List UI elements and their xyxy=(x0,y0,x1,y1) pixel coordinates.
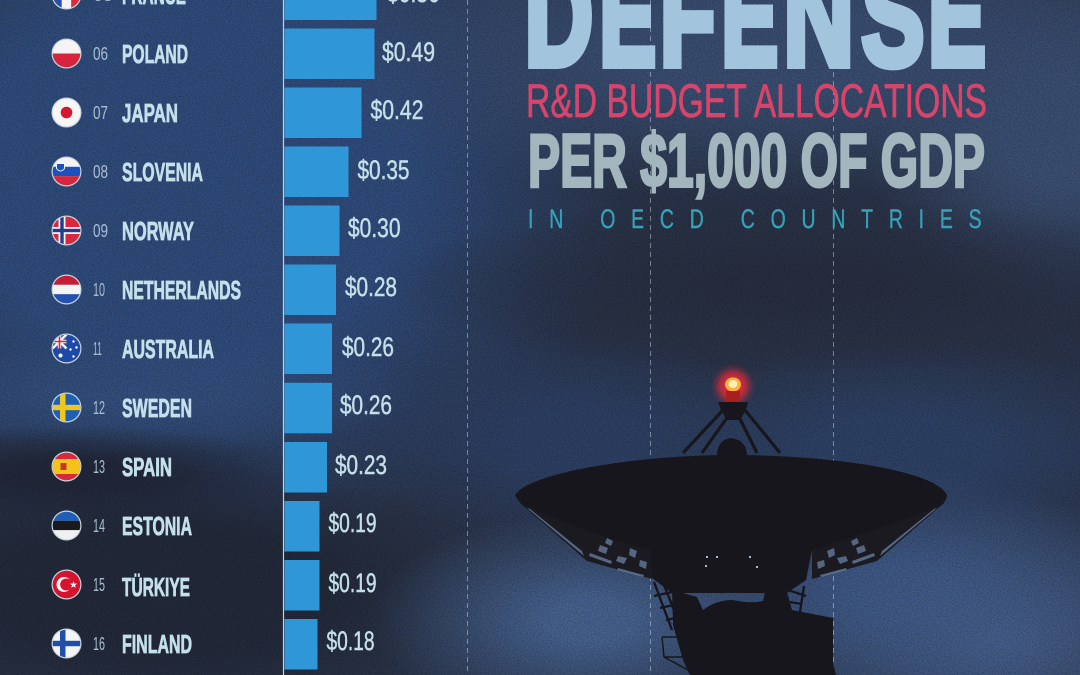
row: Poland xyxy=(52,28,435,79)
row: Türkiye xyxy=(52,560,376,610)
feed support struts xyxy=(683,402,780,456)
row: Netherlands: NETHERLANDS xyxy=(122,275,241,305)
dashed vertical grid lines xyxy=(468,0,834,675)
row: Spain: $0.23 xyxy=(335,450,387,480)
row: Türkiye: $0.19 xyxy=(328,568,376,598)
dish truss lattice xyxy=(520,503,944,670)
row: Australia xyxy=(52,324,394,374)
row: Sweden: $0.26 xyxy=(340,390,392,420)
row: Australia: 11 xyxy=(93,339,102,359)
subtitle: in OECD countries: IN OECD COUNTRIES xyxy=(528,204,982,234)
row: Japan: 07 xyxy=(93,103,108,123)
row: Netherlands: 10 xyxy=(93,280,105,300)
row: Slovenia: 08 xyxy=(93,162,108,182)
row: Japan: $0.42 xyxy=(370,95,424,125)
row: Norway: NORWAY xyxy=(122,216,194,246)
chart axis line xyxy=(282,0,284,675)
row: Estonia: 14 xyxy=(93,516,105,536)
row: Japan xyxy=(52,88,424,138)
row: Netherlands xyxy=(52,264,397,315)
row: Sweden xyxy=(52,383,392,433)
row: Slovenia: SLOVENIA xyxy=(122,157,203,187)
row: Finland: $0.18 xyxy=(326,626,374,656)
row: Spain: SPAIN xyxy=(122,452,172,482)
row: France xyxy=(52,0,440,20)
row: Estonia xyxy=(52,501,376,552)
row: Slovenia: $0.35 xyxy=(358,155,410,185)
beacon glow xyxy=(717,370,749,402)
row: Sweden: SWEDEN xyxy=(122,393,192,423)
row: Japan: JAPAN xyxy=(122,98,178,128)
row: Australia: AUSTRALIA xyxy=(122,334,214,364)
row: Norway: 09 xyxy=(93,221,108,241)
row: Finland xyxy=(52,619,374,670)
row: Netherlands: $0.28 xyxy=(345,272,397,302)
illustration: radio telescope dish with red beacon xyxy=(515,370,947,675)
row: Estonia: $0.19 xyxy=(328,508,376,538)
row: Türkiye: 15 xyxy=(93,575,105,595)
row: Türkiye: TÜRKIYE xyxy=(122,572,190,602)
row: Sweden: 12 xyxy=(93,398,105,418)
row: Finland: FINLAND xyxy=(122,629,192,659)
row: Finland: 16 xyxy=(93,634,105,654)
row: Spain xyxy=(52,442,387,492)
row: Australia: $0.26 xyxy=(342,332,394,362)
row: Norway: $0.30 xyxy=(348,213,400,243)
pedestal xyxy=(672,590,836,675)
dish silhouette xyxy=(515,455,947,593)
row: Poland: 06 xyxy=(93,44,108,64)
row: Spain: 13 xyxy=(93,457,105,477)
row: Estonia: ESTONIA xyxy=(122,511,192,541)
specular points on dish xyxy=(705,556,758,568)
row: Norway xyxy=(52,206,400,256)
row: Slovenia xyxy=(52,146,410,197)
row: Poland: POLAND xyxy=(122,39,188,69)
title: DEFENSE xyxy=(524,0,986,96)
row: Poland: $0.49 xyxy=(382,37,435,67)
